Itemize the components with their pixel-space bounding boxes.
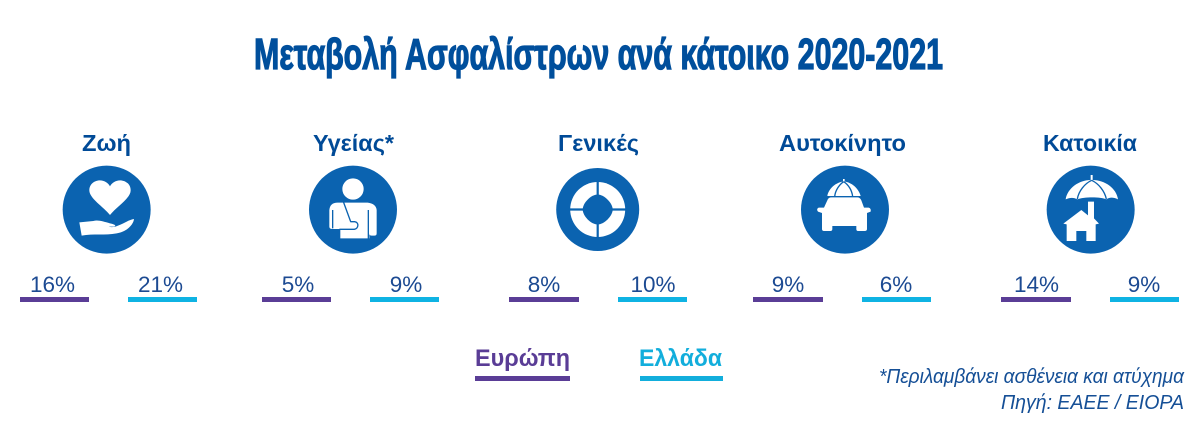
bar: Ευρώπη <box>753 297 823 302</box>
value: Ελλάδα 10%: 10% <box>630 272 676 297</box>
bar: Ελλάδα <box>370 297 439 302</box>
value: Ευρώπη 8%: 8% <box>528 272 560 297</box>
value: Ευρώπη 14%: 14% <box>1014 272 1059 297</box>
icon: person with arm sling <box>309 166 397 254</box>
source note: Πηγή: ΕΑΕΕ / EIOPA <box>1001 392 1184 414</box>
value: Ευρώπη 9%: 9% <box>772 272 804 297</box>
footnote: *Περιλαμβάνει ασθένεια και ατύχημα <box>879 366 1185 388</box>
heading: Ζωή: Ζωή <box>82 130 131 156</box>
panel: Υγείας <box>262 130 439 302</box>
heading: Αυτοκίνητο: Αυτοκίνητο <box>779 130 906 156</box>
heading: Κατοικία: Κατοικία <box>1043 130 1138 156</box>
icon: car under umbrella <box>801 166 889 254</box>
value: Ελλάδα 9%: 9% <box>1128 272 1160 297</box>
bar: Ελλάδα <box>618 297 687 302</box>
bar: Ευρώπη <box>509 297 579 302</box>
heading: Υγείας: Υγείας* <box>313 130 395 156</box>
icon: lifebuoy <box>556 168 639 251</box>
panel: Γενικές <box>509 130 687 302</box>
bar: Ευρώπη <box>1001 297 1071 302</box>
value: Ελλάδα 21%: 21% <box>138 272 183 297</box>
heading: Γενικές: Γενικές <box>558 130 639 156</box>
icon: heart in hand <box>63 166 151 254</box>
value: Ευρώπη 5%: 5% <box>282 272 314 297</box>
value: Ελλάδα 9%: 9% <box>390 272 422 297</box>
bar: Ευρώπη <box>262 297 331 302</box>
bar: Ευρώπη <box>20 297 89 302</box>
legend: Ευρώπη: Ευρώπη <box>475 345 570 372</box>
bar: Ελλάδα <box>1110 297 1179 302</box>
panel: Κατοικία <box>1001 130 1179 302</box>
icon: house under umbrella <box>1047 166 1135 254</box>
panel: Αυτοκίνητο <box>753 130 931 302</box>
legend: Ελλάδα: Ελλάδα <box>639 345 722 372</box>
bar: Ελλάδα <box>862 297 931 302</box>
panel: Ζωή <box>20 130 197 302</box>
value: Ελλάδα 6%: 6% <box>880 272 912 297</box>
value: Ευρώπη 16%: 16% <box>30 272 75 297</box>
bar: Ελλάδα <box>128 297 197 302</box>
